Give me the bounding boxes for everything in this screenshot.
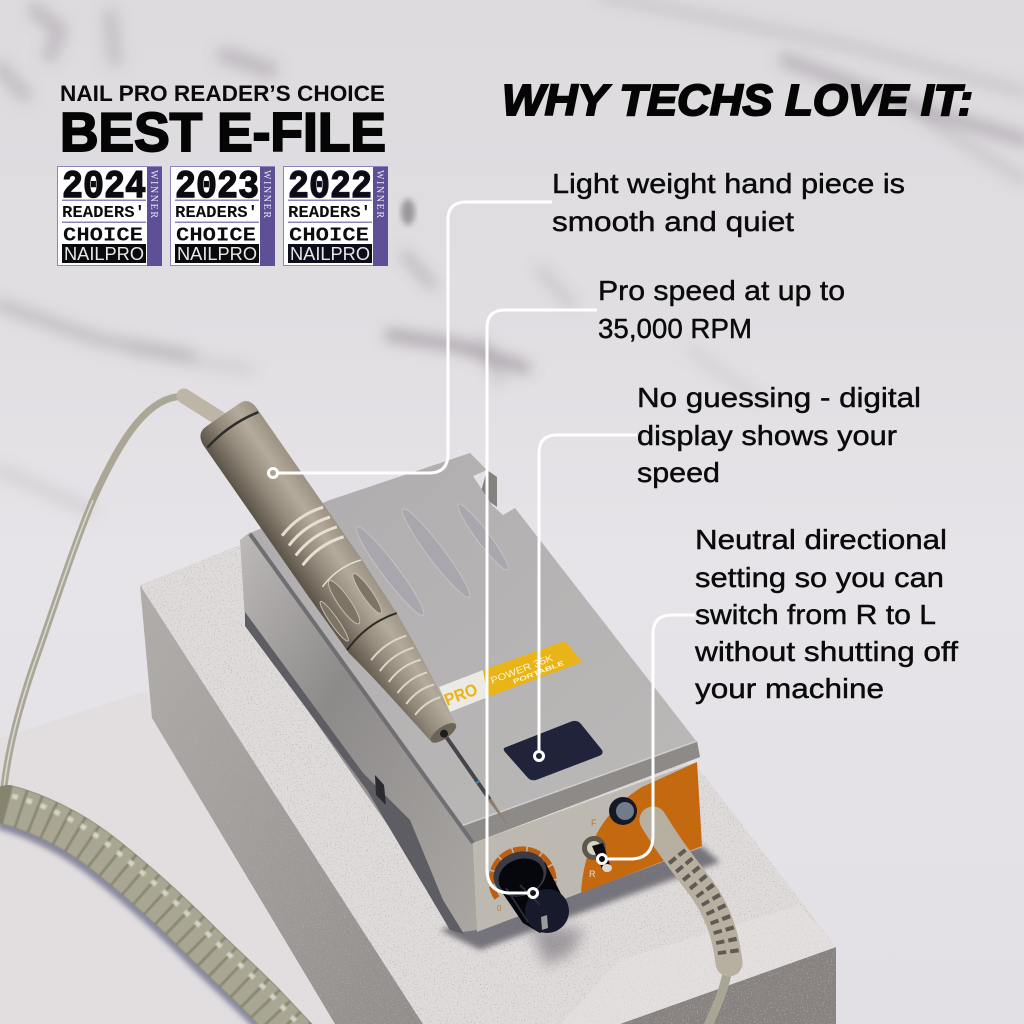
feature: pro speed: Pro speed at up to [598, 275, 845, 306]
grip ovals [310, 564, 387, 643]
feature: neutral directional setting: switch from R to L [695, 599, 936, 630]
cable strain relief [653, 820, 729, 1024]
badge 2022: NAILPRO [290, 243, 370, 264]
speed knob [487, 844, 569, 933]
collar seam [344, 610, 398, 650]
badge 2024: NAILPRO [64, 243, 144, 264]
callout line: digital display [534, 435, 637, 760]
feature: digital display: speed [637, 457, 720, 488]
front panel: F [591, 818, 597, 828]
badge 2024: CHOICE [63, 224, 143, 246]
handpiece [195, 397, 533, 843]
brand label: POWER 35K [489, 653, 555, 687]
callout line: hand piece [268, 202, 552, 478]
grip rings [280, 503, 361, 589]
brand label [439, 641, 582, 712]
e-file control box [240, 453, 729, 1024]
digital display [504, 721, 603, 780]
callout line: speed knob [487, 310, 597, 898]
badge 2022: WINNER [374, 170, 385, 218]
nose tip [428, 719, 459, 746]
callout lines [268, 202, 695, 898]
brand label: PRO [442, 680, 480, 710]
badge 2022: READERS' [288, 204, 371, 223]
cap seam [205, 409, 258, 448]
feature: neutral directional setting: without shutting off [694, 636, 958, 667]
feature: light weight hand piece: Light weight hand piece is [552, 168, 905, 199]
badge 2023: 2023 [175, 165, 259, 209]
badge 2024: 2024 [62, 165, 146, 209]
drill bit [441, 731, 509, 825]
feature: pro speed [598, 275, 845, 344]
feature: digital display [637, 382, 921, 488]
feature: neutral directional setting: your machine [695, 673, 884, 704]
feature: light weight hand piece [552, 168, 905, 237]
badge 2024: READERS' [62, 204, 145, 223]
front panel [473, 762, 702, 932]
vents [351, 500, 513, 620]
feature: neutral directional setting: setting so you can [695, 562, 944, 593]
badge 2022: CHOICE [289, 224, 369, 246]
badge 2024: WINNER [148, 170, 159, 218]
badge 2022: 2022 [288, 165, 372, 209]
feature: digital display: No guessing - digital [637, 382, 921, 413]
badge 2024 [58, 165, 162, 266]
side wall [240, 532, 477, 934]
award header [60, 81, 386, 163]
feature: light weight hand piece: smooth and quiet [552, 206, 794, 237]
badge 2023: READERS' [175, 204, 258, 223]
direction switch [582, 836, 612, 872]
body [195, 397, 470, 752]
power cord [3, 396, 222, 795]
indicator light [609, 797, 637, 825]
title: WHY TECHS LOVE IT: [502, 76, 973, 125]
front panel: R [589, 869, 596, 879]
brand label: PORTABLE [512, 660, 566, 686]
award heading: BEST E-FILE [60, 101, 386, 163]
feature: neutral directional setting: Neutral directional [695, 524, 947, 555]
badge 2023: CHOICE [176, 224, 256, 246]
badge 2023 [170, 165, 275, 266]
top panel [250, 453, 700, 843]
badge 2023: NAILPRO [177, 243, 257, 264]
front panel: 0 [497, 904, 502, 913]
coiled cable [0, 796, 306, 1024]
badge 2023: WINNER [261, 170, 272, 218]
feature: digital display: display shows your [637, 420, 897, 451]
badge 2022 [284, 165, 388, 266]
taper rings [369, 633, 446, 718]
callout line: direction switch [598, 615, 695, 864]
stone plinth [140, 543, 836, 1024]
feature: pro speed: 35,000 RPM [598, 313, 752, 344]
feature: neutral directional setting [694, 524, 958, 704]
award kicker: NAIL PRO READER’S CHOICE [60, 81, 385, 106]
